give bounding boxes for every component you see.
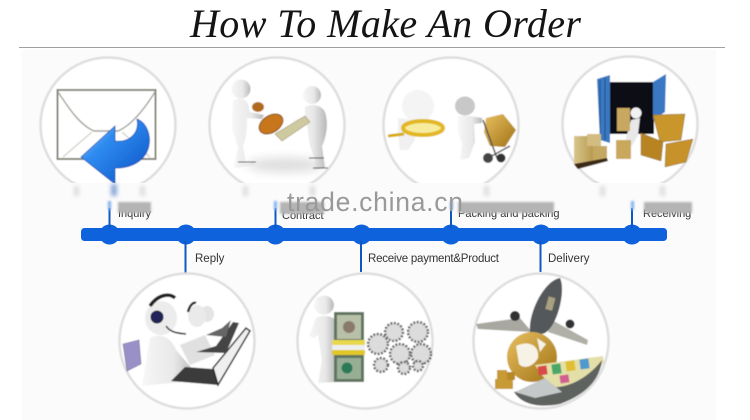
timeline [81, 208, 667, 274]
panel: packing circle [384, 58, 518, 192]
icon: money stack [332, 312, 365, 382]
icon: document [275, 116, 310, 141]
icon: gold boxes [495, 370, 515, 389]
watermark: trade.china.cn [287, 187, 463, 217]
title: How To Make An Order [189, 1, 581, 46]
icon: wooden crates [641, 114, 693, 167]
icon: envelope [58, 90, 156, 159]
icon: stamp [252, 102, 287, 138]
blurred patches over top labels [118, 202, 692, 214]
label: inquiry: Inquiry [118, 208, 152, 220]
label: contract: Contract [282, 210, 324, 222]
icon: gears [368, 322, 431, 374]
icon: cargo ship [514, 356, 604, 406]
label: reply: Reply [195, 253, 225, 265]
icon: container [597, 74, 666, 143]
panel: payment circle [298, 274, 432, 408]
label: receiving: Receiving [643, 208, 691, 220]
icon: worker with boxes [616, 108, 642, 159]
label: receive payment and product: Receive payment&Product [368, 253, 500, 265]
icon: figure behind gold ring [388, 90, 443, 150]
label: packing: Packing and packing [458, 208, 560, 220]
panel: receiving circle [562, 56, 698, 192]
icon: laptops [171, 320, 250, 385]
icon: airplane [476, 278, 588, 345]
icon: globe [507, 332, 557, 382]
panel: delivery circle [474, 274, 608, 408]
panel: inquiry circle [40, 58, 176, 192]
icon: purple chart board [123, 340, 141, 371]
icon: right figure [293, 86, 327, 170]
panel: reply circle [120, 274, 254, 408]
panel: contract circle [210, 58, 344, 192]
icon: left figure [232, 80, 264, 168]
label: delivery: Delivery [548, 253, 590, 265]
decorative fade below the top circles [30, 183, 710, 201]
icon: blue reply arrow [81, 119, 149, 184]
icon: figure [309, 296, 336, 383]
icon: call center workers [142, 295, 215, 386]
icon: cardboard boxes on pallet [574, 134, 608, 169]
icon: figure with hand truck [455, 96, 516, 163]
